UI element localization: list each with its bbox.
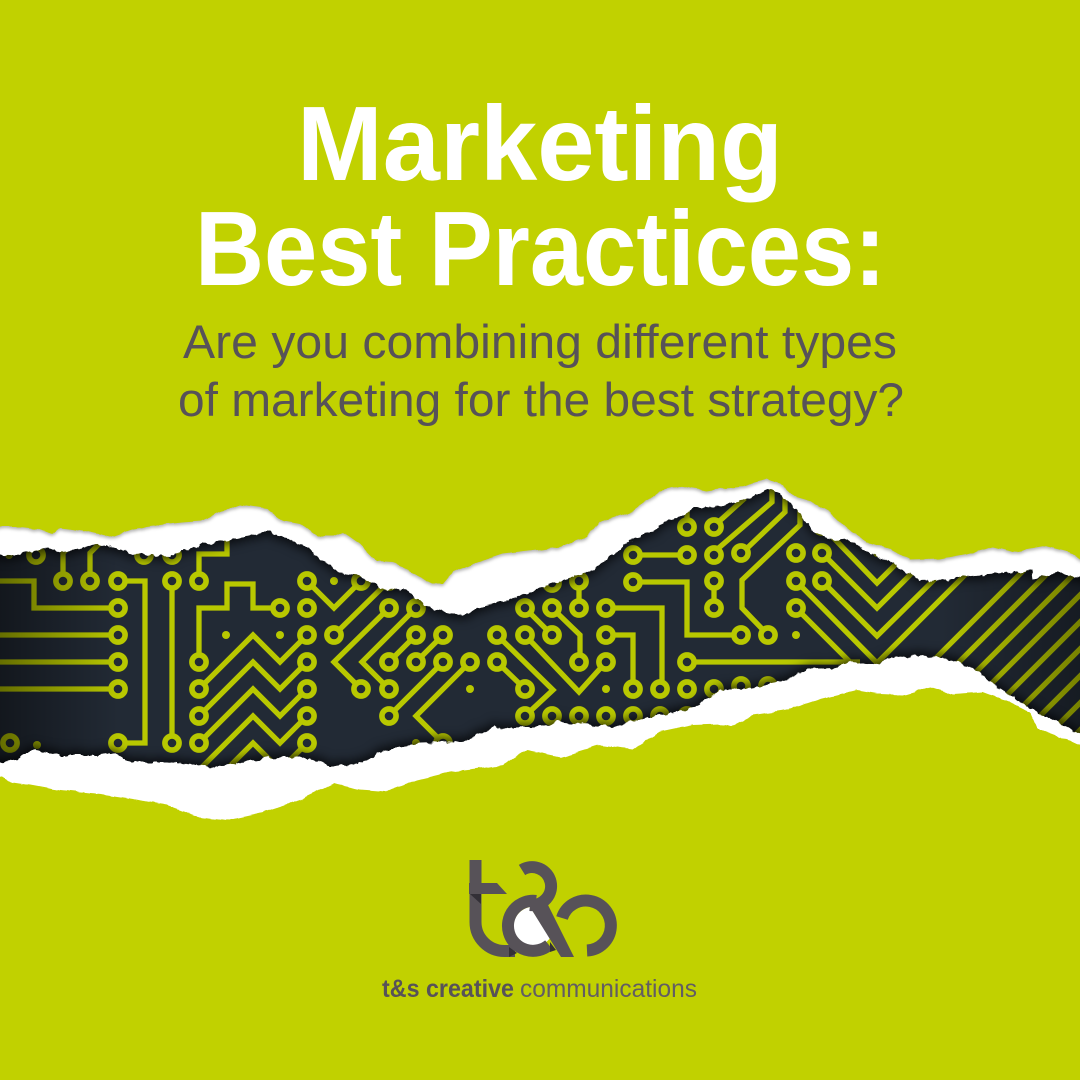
title: Best Practices: xyxy=(195,190,886,308)
logo wordmark: t&s creative xyxy=(382,975,514,1003)
logo wordmark: communications xyxy=(520,975,697,1003)
subtitle xyxy=(178,315,904,426)
circuit board revealed through the tear xyxy=(0,470,1080,780)
lime paper: top section xyxy=(0,0,1080,584)
circuit traces xyxy=(0,484,975,770)
subtitle: of marketing for the best strategy? xyxy=(178,373,904,426)
diagonal stripes xyxy=(894,560,1080,740)
subtitle: Are you combining different types xyxy=(183,315,897,368)
logo mark xyxy=(469,860,611,957)
torn white paper: top edge xyxy=(0,0,1080,615)
logo: folded shadows xyxy=(470,894,556,957)
lime paper: bottom section xyxy=(0,687,1080,1080)
logo: strokes xyxy=(476,860,611,951)
logo: white half disc xyxy=(514,907,550,947)
torn white paper: bottom edge xyxy=(0,655,1080,1080)
logo: crossbar and diagonal xyxy=(469,883,574,957)
title: Marketing xyxy=(297,85,783,203)
logo wordmark xyxy=(382,975,697,1003)
circuit dots xyxy=(5,549,881,749)
circuit pads xyxy=(3,519,829,750)
title xyxy=(195,85,886,308)
